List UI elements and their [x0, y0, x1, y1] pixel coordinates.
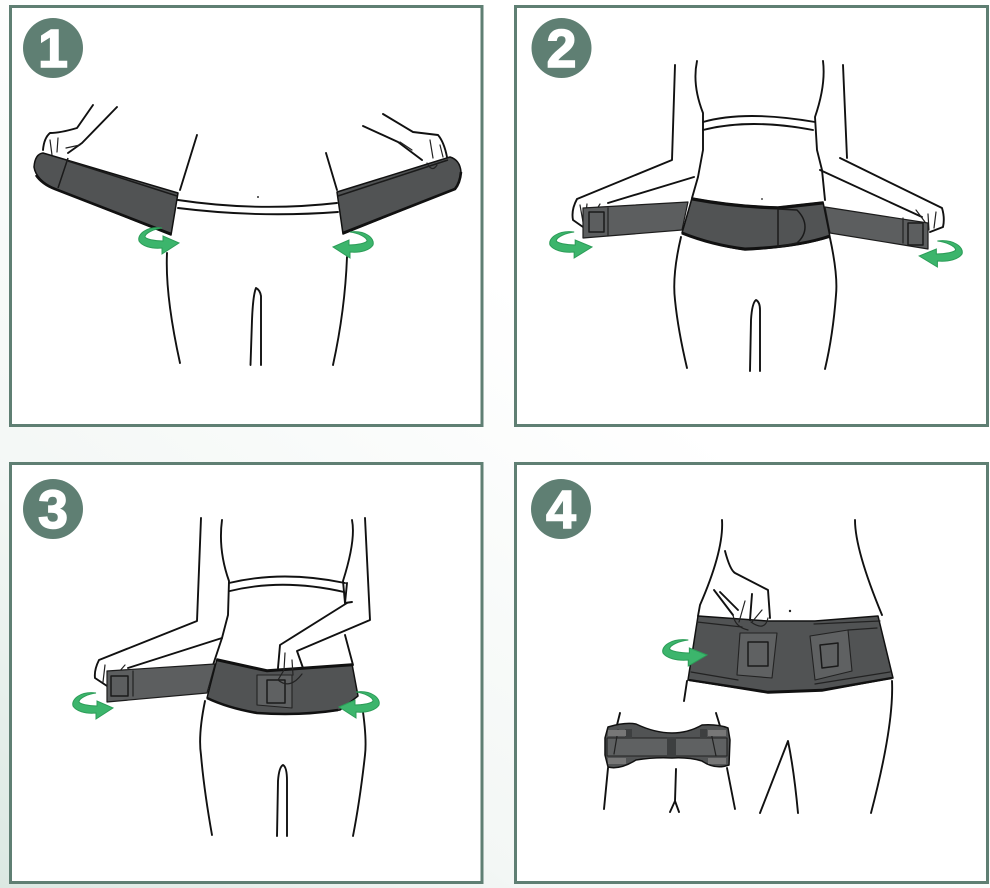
right hand and arm step 1 [363, 114, 447, 160]
panel: step 1 [10, 6, 482, 426]
belt centre step 3 [207, 659, 358, 714]
hand on belt step 4 [714, 551, 770, 630]
green arrow right step 2 [919, 241, 962, 267]
green arrow step 4 [663, 640, 707, 666]
step number badge 2: 2 [546, 19, 577, 79]
figure: body outline step 2 [674, 61, 836, 371]
belt strap step 3 [107, 664, 215, 702]
step number badge 1 [23, 18, 83, 79]
right arm and hand step 3 [278, 518, 370, 684]
belt centre step 2 [682, 198, 830, 250]
small back view figure with belt step 4 [604, 713, 735, 812]
belt fastened step 4 [688, 616, 893, 693]
belt straps step 2 [583, 202, 928, 249]
step number badge 3 [23, 479, 83, 540]
left hand and arm step 1 [43, 105, 117, 155]
figure: body outline step 1 [167, 135, 347, 365]
panel: step 4 [516, 464, 988, 882]
green arrow left step 2 [550, 232, 592, 258]
figure: body outline step 4 [684, 520, 892, 813]
figure: body outline step 3 [200, 520, 366, 836]
belt left half step 1 [34, 153, 178, 235]
right arm step 2 [820, 65, 944, 232]
step number badge 4: 4 [546, 480, 576, 540]
left arm step 3 [95, 518, 222, 686]
step number badge 1: 1 [38, 19, 68, 79]
panel: step 2 [516, 6, 988, 426]
green arrow right step 1 [333, 232, 373, 258]
step number badge 4 [531, 479, 591, 540]
green arrow left step 3 [73, 693, 113, 719]
left arm step 2 [572, 65, 694, 227]
panel: step 3 [10, 464, 482, 882]
green arrow right step 3 [339, 692, 379, 718]
step number badge 2 [532, 18, 592, 79]
belt right half step 1 [337, 157, 461, 234]
green arrow left step 1 [139, 228, 179, 254]
step number badge 3: 3 [38, 480, 68, 540]
